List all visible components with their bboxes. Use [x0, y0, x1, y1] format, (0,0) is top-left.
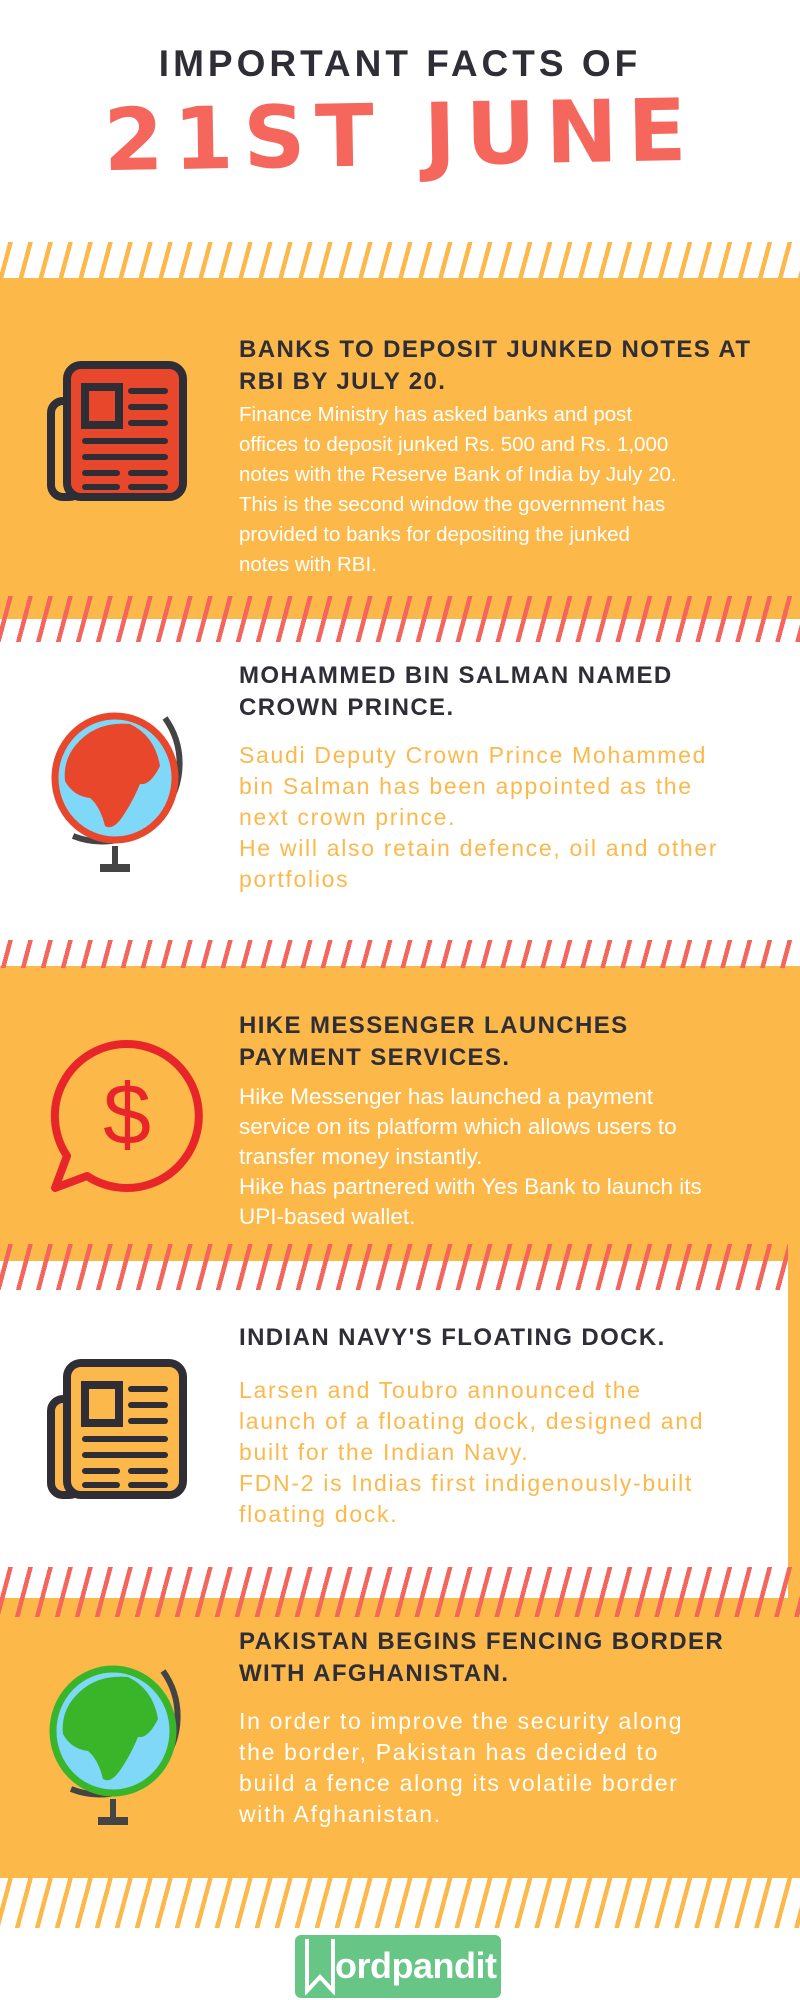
body: UPI-based wallet.: [239, 1204, 415, 1229]
body: [239, 742, 718, 892]
stripes band 2: [0, 596, 800, 642]
body: [239, 1708, 683, 1827]
panel 4: navy: [47, 1324, 704, 1527]
body: the border, Pakistan has decided to: [239, 1739, 659, 1765]
panel 2: crown prince: [52, 662, 718, 892]
body: bin Salman has been appointed as the: [239, 773, 693, 799]
heading: INDIAN NAVY'S FLOATING DOCK.: [239, 1324, 666, 1351]
body: service on its platform which allows users to: [239, 1114, 677, 1139]
icon: newspaper red: [47, 361, 187, 501]
stripes band 4: [0, 1244, 788, 1290]
body: Finance Ministry has asked banks and post: [239, 403, 632, 426]
panel 5: pakistan: [50, 1628, 724, 1827]
body: This is the second window the government has: [239, 493, 665, 516]
stripes band 6: [0, 1878, 800, 1928]
heading: PAKISTAN BEGINS FENCING BORDER: [239, 1628, 724, 1655]
body: offices to deposit junked Rs. 500 and Rs. 1,000: [239, 433, 668, 456]
body: floating dock.: [239, 1501, 398, 1527]
title: [103, 43, 697, 191]
body: [239, 1377, 704, 1527]
body: notes with the Reserve Bank of India by July 20.: [239, 463, 677, 486]
body: [239, 1084, 702, 1229]
logo text: ordpandit: [335, 1945, 496, 1986]
panel 1: banks: [47, 336, 751, 576]
body: Larsen and Toubro announced the: [239, 1377, 642, 1403]
heading: [239, 662, 673, 721]
heading: [239, 1628, 724, 1687]
body: transfer money instantly.: [239, 1144, 482, 1169]
stripes band 3: [0, 940, 800, 968]
heading: HIKE MESSENGER LAUNCHES: [239, 1012, 629, 1039]
logo: wordpandit: [295, 1935, 501, 1998]
body: provided to banks for depositing the junked: [239, 523, 630, 546]
stripes band 1: [0, 242, 800, 278]
icon: newspaper orange: [47, 1359, 187, 1499]
body: FDN-2 is Indias first indigenously-built: [239, 1470, 693, 1496]
body: with Afghanistan.: [239, 1801, 442, 1827]
heading: WITH AFGHANISTAN.: [239, 1660, 509, 1687]
body: next crown prince.: [239, 804, 456, 830]
body: build a fence along its volatile border: [239, 1770, 679, 1796]
backgrounds: [0, 278, 800, 619]
icon: globe green: [50, 1666, 181, 1825]
heading: PAYMENT SERVICES.: [239, 1044, 510, 1071]
body: [239, 403, 677, 576]
panel 3: hike: [50, 1012, 702, 1229]
icon: dollar speech bubble: $: [103, 1067, 151, 1163]
logo W mark: [305, 1939, 335, 1995]
heading: BANKS TO DEPOSIT JUNKED NOTES AT: [239, 336, 751, 363]
heading: [239, 1012, 629, 1071]
body: Saudi Deputy Crown Prince Mohammed: [239, 742, 707, 768]
icon: dollar speech bubble: [50, 1040, 203, 1192]
title line 2: 21ST JUNE: [103, 81, 697, 191]
body: launch of a floating dock, designed and: [239, 1408, 704, 1434]
heading: CROWN PRINCE.: [239, 694, 455, 721]
body: Hike has partnered with Yes Bank to launch its: [239, 1174, 702, 1199]
heading: MOHAMMED BIN SALMAN NAMED: [239, 662, 673, 689]
body: Hike Messenger has launched a payment: [239, 1084, 653, 1109]
heading: [239, 336, 751, 395]
body: portfolios: [239, 866, 349, 892]
title line 1: IMPORTANT FACTS OF: [159, 43, 641, 84]
heading: RBI BY JULY 20.: [239, 368, 446, 395]
stripes band 5: [0, 1567, 800, 1617]
body: He will also retain defence, oil and other: [239, 835, 718, 861]
icon: globe red: [52, 712, 183, 872]
body: built for the Indian Navy.: [239, 1439, 530, 1465]
body: notes with RBI.: [239, 553, 377, 576]
body: In order to improve the security along: [239, 1708, 683, 1734]
